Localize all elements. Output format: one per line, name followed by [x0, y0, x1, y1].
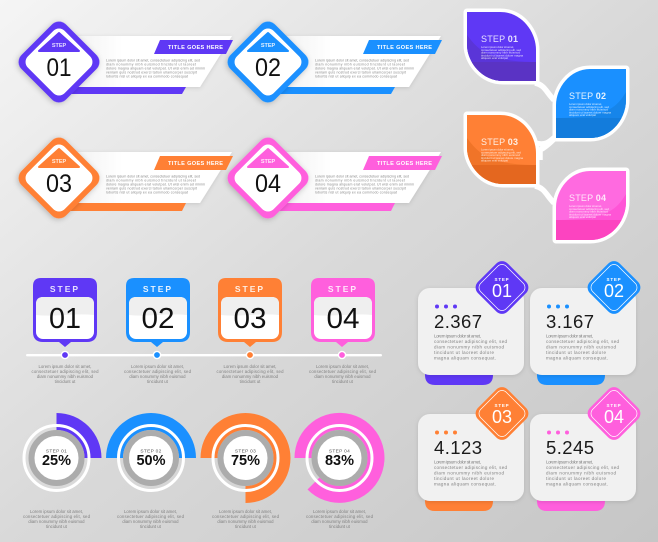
diamond 02: [223, 17, 313, 107]
title tab 01: [154, 40, 233, 54]
stat card 04: diam nonummy nibh euismod: [546, 470, 616, 476]
body text 01: diam nonummy nibh euismod tincidunt ut laoreet: [106, 62, 196, 66]
leaf step 04: [550, 165, 630, 245]
stat card 03: consectetuer adipiscing elit, sed: [434, 465, 507, 470]
body text 04: dolore magna aliquam erat volutpat. Ut wisi enim ad minim: [315, 182, 414, 186]
white text panel 04: [284, 152, 441, 203]
body text 03: Lorem ipsum dolor sit amet, consectetuer adipiscing elit, sed: [106, 174, 200, 178]
timeline step 03: STEP: [235, 284, 265, 294]
donut 50%: consectetuer adipiscing elit, sed: [117, 514, 185, 519]
timeline step 04: Lorem ipsum dolor sit amet,: [316, 364, 369, 369]
donut 83%: diam nonummy nibh euismod: [311, 519, 368, 524]
panel: step 01 banner: [14, 17, 233, 107]
donut 50%: tincidunt ut: [140, 524, 162, 529]
timeline step 04: 04: [326, 303, 360, 335]
body text 03: diam nonummy nibh euismod tincidunt ut laoreet: [106, 178, 196, 182]
leaf step 02: [552, 66, 630, 142]
stat card 02: diam nonummy nibh euismod: [546, 344, 616, 350]
leaf step 01: STEP 01: [481, 34, 518, 44]
timeline step 03: consectetuer adipiscing elit, sed: [216, 369, 284, 374]
leaf step 02: diam nonummy nibh euismod: [569, 108, 608, 112]
donut 50%: STEP 02: [140, 448, 162, 454]
donut 83%: 83%: [325, 453, 354, 469]
donut 25%: Lorem ipsum dolor sit amet,: [30, 509, 83, 514]
donut 75%: [200, 413, 291, 529]
stat card 01: diam nonummy nibh euismod: [434, 344, 504, 350]
diamond 04: 04: [255, 170, 281, 198]
timeline step 02: tincidunt ut: [147, 379, 169, 384]
leaf step 03: Lorem ipsum dolor sit amet,: [481, 148, 514, 152]
timeline step 02: diam nonummy nibh euismod: [129, 374, 186, 379]
donut 83%: [294, 413, 384, 529]
timeline step 02: consectetuer adipiscing elit, sed: [124, 369, 192, 374]
panel: timeline: [26, 278, 382, 384]
stat card 04: tincidunt ut laoreet dolore: [546, 476, 606, 481]
timeline step 01: Lorem ipsum dolor sit amet,: [38, 364, 92, 369]
body text 02: veniam quis nostrud exerci tation ullamcorper suscipit: [315, 70, 406, 74]
body text 04: lobortis nisl ut aliquip ex ea commodo consequat: [315, 190, 397, 194]
leaf step 03: diam nonummy nibh euismod: [481, 153, 520, 157]
stat card 02: STEP: [607, 277, 621, 282]
stat card 02: 3.167: [546, 311, 594, 332]
donut 25%: consectetuer adipiscing elit, sed: [23, 514, 91, 519]
stat card 04: [530, 384, 644, 511]
stat card 03: 4.123: [434, 437, 482, 458]
leaf step 03: STEP 03: [481, 137, 518, 147]
leaf step 04: tincidunt ut laoreet dolore magna: [569, 212, 611, 216]
donut 25%: 25%: [42, 453, 71, 469]
timeline step 01: diam nonummy nibh euismod: [37, 374, 94, 379]
timeline step 02: 02: [142, 303, 174, 335]
diamond 04: STEP: [261, 159, 276, 165]
leaf step 01: aliquam erat volutpat: [481, 56, 508, 60]
stat card 03: Lorem ipsum dolor sit amet,: [434, 460, 481, 464]
diamond 03: 03: [46, 170, 72, 198]
stat card 02: tincidunt ut laoreet dolore: [546, 350, 606, 355]
title tab 02: [363, 40, 442, 54]
stat card 02: magna aliquam consequat.: [546, 356, 608, 360]
bottom bar 04: [279, 203, 395, 211]
timeline step 04: tincidunt ut: [332, 379, 354, 384]
donut 50%: diam nonummy nibh euismod: [122, 519, 179, 524]
leaf step 01: Lorem ipsum dolor sit amet,: [481, 45, 514, 49]
body text 04: Lorem ipsum dolor sit amet, consectetuer adipiscing elit, sed: [315, 174, 409, 178]
title text 01: TITLE GOES HERE: [168, 45, 223, 51]
body text 02: [315, 58, 414, 78]
donut 25%: diam nonummy nibh euismod: [28, 519, 85, 524]
stat card 01: STEP: [495, 277, 509, 282]
stat card 04: 04: [604, 407, 624, 427]
leaf step 03: consectetuer adipiscing elit, sed: [481, 150, 521, 154]
leaf step 02: aliquam erat volutpat: [569, 113, 596, 117]
timeline step 04: [309, 278, 377, 384]
timeline line: [26, 354, 382, 356]
white text panel 03: [75, 152, 232, 203]
stat card 01: 2.367: [434, 311, 482, 332]
body text 01: Lorem ipsum dolor sit amet, consectetuer adipiscing elit, sed: [106, 58, 200, 62]
donut 75%: tincidunt ut: [235, 524, 257, 529]
body text 03: [106, 174, 205, 194]
donut 50%: 50%: [136, 453, 166, 469]
donut 83%: tincidunt ut: [329, 524, 351, 529]
donut 75%: Lorem ipsum dolor sit amet,: [219, 509, 272, 514]
panel: step 02 banner: [223, 17, 442, 107]
title text 03: TITLE GOES HERE: [168, 161, 223, 167]
leaf step 02: consectetuer adipiscing elit, sed: [569, 105, 609, 109]
stat card 01: [418, 258, 532, 385]
timeline step 03: [216, 278, 284, 384]
donut 75%: diam nonummy nibh euismod: [217, 519, 274, 524]
stat card 01: consectetuer adipiscing elit, sed: [434, 339, 507, 344]
body text 02: lobortis nisl ut aliquip ex ea commodo consequat: [315, 74, 397, 78]
leaf step 02: tincidunt ut laoreet dolore magna: [569, 110, 611, 114]
stat card 04: STEP: [607, 403, 621, 408]
donut 75%: 75%: [231, 453, 260, 469]
diamond 03: [14, 133, 104, 223]
bottom bar 01: [70, 87, 186, 94]
donut 83%: Lorem ipsum dolor sit amet,: [313, 509, 366, 514]
stat card 01: Lorem ipsum dolor sit amet,: [434, 334, 481, 338]
timeline step 03: 03: [234, 303, 266, 335]
timeline step 01: STEP: [50, 284, 80, 294]
timeline step 02: Lorem ipsum dolor sit amet,: [131, 364, 184, 369]
diamond 04: [223, 133, 313, 223]
stat card 02: consectetuer adipiscing elit, sed: [546, 339, 619, 344]
leaf step 01: tincidunt ut laoreet dolore magna: [481, 53, 523, 57]
leaf step 04: consectetuer adipiscing elit, sed: [569, 207, 609, 211]
body text 01: lobortis nisl ut aliquip ex ea commodo consequat: [106, 74, 188, 78]
timeline step 02: [124, 278, 192, 384]
title tab 03: [154, 156, 233, 170]
body text 03: dolore magna aliquam erat volutpat. Ut wisi enim ad minim: [106, 182, 205, 186]
diamond 03: STEP: [52, 159, 67, 165]
leaf step 04: aliquam erat volutpat: [569, 215, 596, 219]
body text 03: lobortis nisl ut aliquip ex ea commodo consequat: [106, 190, 188, 194]
body text 04: [315, 174, 414, 194]
stat card 03: diam nonummy nibh euismod: [434, 470, 504, 476]
stat card 02: 02: [604, 281, 624, 301]
title text 04: TITLE GOES HERE: [377, 161, 432, 167]
diamond 01: 01: [46, 54, 72, 82]
panel: donut charts: [23, 413, 384, 529]
title text 02: TITLE GOES HERE: [377, 45, 432, 51]
stat card 03: tincidunt ut laoreet dolore: [434, 476, 494, 481]
body text 04: diam nonummy nibh euismod tincidunt ut laoreet: [315, 178, 405, 182]
donut 50%: [106, 413, 196, 529]
donut 25%: tincidunt ut: [46, 524, 68, 529]
leaf step 01: diam nonummy nibh euismod: [481, 51, 520, 55]
panel: leaf tree: [460, 5, 630, 245]
leaf step 01: [464, 8, 540, 84]
leaf step 04: Lorem ipsum dolor sit amet,: [569, 204, 602, 208]
diamond 02: 02: [255, 54, 281, 82]
stat card 03: magna aliquam consequat.: [434, 482, 496, 486]
leaf step 02: Lorem ipsum dolor sit amet,: [569, 102, 602, 106]
stat card 03: STEP: [495, 403, 509, 408]
leaf step 03: aliquam erat volutpat: [481, 159, 508, 163]
body text 02: dolore magna aliquam erat volutpat. Ut wisi enim ad minim: [315, 66, 414, 70]
stat card 04: consectetuer adipiscing elit, sed: [546, 465, 619, 470]
timeline step 03: diam nonummy nibh euismod: [222, 374, 279, 379]
panel: step 03 banner: [14, 133, 233, 223]
leaf step 04: STEP 04: [569, 193, 606, 203]
white text panel 02: [284, 36, 441, 87]
timeline step 03: tincidunt ut: [240, 379, 261, 384]
body text 03: veniam quis nostrud exerci tation ullamcorper suscipit: [106, 186, 197, 190]
body text 01: veniam quis nostrud exerci tation ullamcorper suscipit: [106, 70, 197, 74]
leaf step 01: consectetuer adipiscing elit, sed: [481, 48, 521, 52]
stat card 03: 03: [492, 407, 512, 427]
timeline step 03: Lorem ipsum dolor sit amet,: [223, 364, 277, 369]
leaf step 04: diam nonummy nibh euismod: [569, 210, 608, 214]
leaf step 02: STEP 02: [569, 91, 606, 101]
body text 02: Lorem ipsum dolor sit amet, consectetuer adipiscing elit, sed: [315, 58, 409, 62]
body text 01: dolore magna aliquam erat volutpat. Ut wisi enim ad minim: [106, 66, 205, 70]
donut 50%: Lorem ipsum dolor sit amet,: [124, 509, 177, 514]
diamond 01: [14, 17, 104, 107]
timeline step 02: STEP: [143, 284, 173, 294]
stat card 01: magna aliquam consequat.: [434, 356, 496, 360]
body text 04: veniam quis nostrud exerci tation ullamcorper suscipit: [315, 186, 406, 190]
bottom bar 02: [279, 87, 395, 94]
stat card 04: magna aliquam consequat.: [546, 482, 608, 486]
stat card 01: 01: [492, 281, 512, 301]
title tab 04: [363, 156, 442, 170]
timeline step 01: 01: [49, 303, 81, 335]
bottom bar 03: [70, 203, 186, 211]
donut 25%: [23, 413, 102, 529]
timeline step 04: diam nonummy nibh euismod: [314, 374, 371, 379]
donut 25%: STEP 01: [46, 448, 67, 454]
donut 83%: STEP 04: [329, 448, 350, 454]
diamond 02: STEP: [261, 43, 276, 49]
stat card 03: [418, 384, 532, 511]
leaf step 03: tincidunt ut laoreet dolore magna: [481, 156, 523, 160]
stat card 02: Lorem ipsum dolor sit amet,: [546, 334, 593, 338]
stat card 04: 5.245: [546, 437, 594, 458]
body text 01: [106, 58, 205, 78]
timeline step 01: consectetuer adipiscing elit, sed: [32, 369, 99, 374]
timeline step 04: consectetuer adipiscing elit, sed: [309, 369, 377, 374]
donut 83%: consectetuer adipiscing elit, sed: [306, 514, 374, 519]
panel: stat cards: [418, 258, 644, 511]
timeline step 01: tincidunt ut: [55, 379, 76, 384]
stat card 01: tincidunt ut laoreet dolore: [434, 350, 494, 355]
timeline step 01: [32, 278, 99, 384]
timeline step 04: STEP: [328, 284, 358, 294]
donut 75%: consectetuer adipiscing elit, sed: [212, 514, 280, 519]
stat card 04: Lorem ipsum dolor sit amet,: [546, 460, 593, 464]
leaf step 03: [464, 112, 540, 188]
leaf connectors: [535, 83, 556, 203]
donut 75%: STEP 03: [235, 448, 256, 454]
panel: step 04 banner: [223, 133, 442, 223]
body text 02: diam nonummy nibh euismod tincidunt ut laoreet: [315, 62, 405, 66]
stat card 02: [530, 258, 644, 385]
diamond 01: STEP: [52, 43, 67, 49]
white text panel 01: [75, 36, 232, 87]
